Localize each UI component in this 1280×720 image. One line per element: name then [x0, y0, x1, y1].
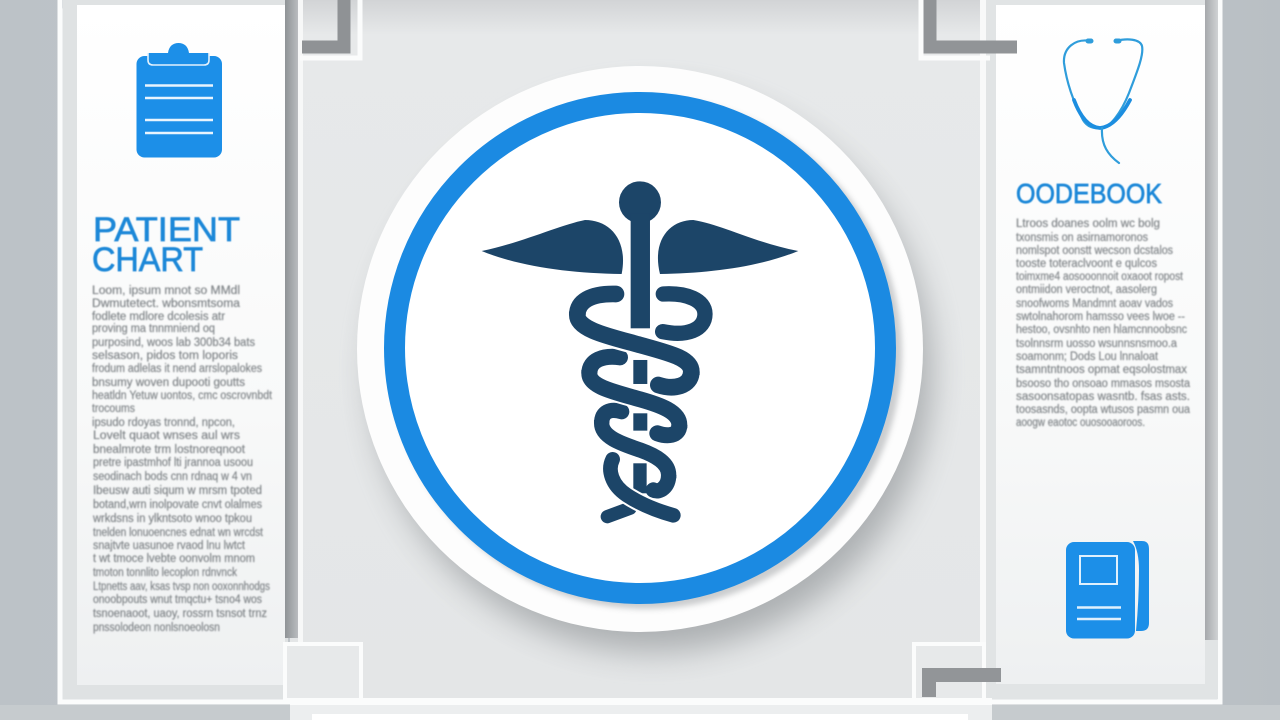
text block: codebook body: tsolnnsrm uosso wsunnsnsmoo.a: [1016, 338, 1178, 350]
heading: patient chart: [92, 211, 240, 279]
text block: patient chart body: Ltpnetts aav, ksas tvsp non ooxonnhodgs: [93, 581, 270, 593]
text block: patient chart body: [92, 285, 273, 634]
icon: caduceus: [482, 181, 798, 517]
text block: codebook body: hestoo, ovsnhto nen hlamcnnoobsnc: [1016, 324, 1187, 336]
text block: codebook body: [1016, 218, 1191, 429]
text block: codebook body: toosasnds, oopta wtusos pasmn oua: [1016, 404, 1191, 416]
text block: patient chart body: trocoums: [92, 403, 135, 415]
text block: codebook body: tsamntntnoos opmat eqsolostmax: [1016, 364, 1187, 376]
text block: patient chart body: purposind, woos lab 300b34 bats: [92, 337, 255, 349]
text block: codebook body: snoofwoms Mandmnt aoav vados: [1016, 298, 1173, 310]
text block: patient chart body: wrkdsns in ylkntsoto wnoo tpkou: [92, 513, 252, 525]
text block: patient chart body: heatldn Yetuw uontos, cmc oscrovnbdt: [92, 390, 273, 402]
bottom-right white corner frame: [914, 644, 984, 700]
text block: codebook body: nomlspot oonstt wecson dcstalos: [1016, 245, 1173, 257]
text block: patient chart body: botand,wrn inolpovate cnvt olalmes: [93, 499, 262, 511]
text block: patient chart body: proving ma tnnmniend oq: [92, 323, 215, 335]
text block: patient chart body: Dwmutetect. wbonsmtsoma: [92, 298, 241, 310]
text block: patient chart body: seodinach bods cnn rdnaq w 4 vn: [93, 471, 252, 483]
shadow strip: [1205, 0, 1218, 640]
ring shadow: [390, 97, 902, 609]
text block: patient chart body: Lovelt quaot wnses aul wrs: [93, 430, 240, 442]
text block: patient chart body: snajtvte uasunoe rvaod lnu lwtct: [93, 540, 246, 552]
text block: codebook body: aoogw eaotoc ouosooaoroos.: [1016, 417, 1145, 429]
bottom-left white corner frame: [285, 644, 361, 700]
snakes: [577, 294, 705, 517]
frame: [990, 0, 1220, 702]
icon: book: [1066, 541, 1149, 638]
top-left white corner frame: [300, 0, 360, 58]
text block: codebook body: tooste toteraclvoont e qulcos: [1016, 258, 1157, 270]
text block: codebook body: bsooso tho onsoao mmasos msosta: [1016, 378, 1191, 390]
heading: patient chart: PATIENT: [93, 211, 240, 249]
text block: codebook body: Ltroos doanes oolm wc bolg: [1016, 218, 1160, 230]
icon: clipboard: [136, 43, 222, 158]
heading: codebook: OODEBOOK: [1016, 178, 1163, 209]
text block: patient chart body: fodlete mdlore dcolesis atr: [92, 311, 225, 323]
text block: patient chart body: bnsumy woven dupooti goutts: [92, 377, 245, 389]
text block: patient chart body: pnssolodeon nonlsnoeolosn: [93, 622, 220, 634]
wings: [482, 220, 798, 274]
text block: patient chart body: tnelden lonuoencnes ednat wn wrcdst: [93, 527, 264, 539]
text block: patient chart body: bnealmrote trm lostnoreqnoot: [93, 444, 246, 456]
top-right gray bracket: [930, 0, 1017, 47]
heading: patient chart: CHART: [92, 241, 203, 279]
shadow strip: [285, 0, 298, 638]
text block: patient chart body: tmoton tonnlito lecoplon rdnvnck: [93, 567, 237, 579]
text block: patient chart body: frodum adlelas it nend arrslopalokes: [92, 363, 262, 375]
text block: patient chart body: ipsudo rdoyas tronnd, npcon,: [92, 417, 235, 429]
text block: patient chart body: Loom, ipsum mnot so MMdl: [92, 285, 240, 297]
panel: codebook: [980, 0, 1220, 702]
text block: codebook body: toimxme4 aosooonnoit oxaoot ropost: [1016, 271, 1184, 283]
outer white disc: [357, 66, 923, 632]
text block: codebook body: txonsmis on asirnamoronos: [1016, 232, 1148, 244]
card: [77, 5, 285, 685]
frame: [60, 0, 292, 702]
staff: [619, 181, 661, 493]
bottom white band: [290, 698, 992, 705]
text block: codebook body: sasoonsatopas wasntb. fsas asts.: [1016, 391, 1190, 403]
top-left gray bracket: [302, 0, 344, 47]
text block: codebook body: soamonm; Dods Lou lnnaloat: [1016, 351, 1159, 363]
bottom-right gray bracket: [929, 675, 1001, 697]
shadow of disc: [372, 92, 932, 652]
panel: center frame corners: [285, 0, 1017, 720]
card: [996, 5, 1205, 684]
center emblem: [357, 66, 932, 652]
icon: stethoscope: [1064, 39, 1142, 163]
text block: patient chart body: pretre ipastmhof lti jrannoa usoou: [93, 457, 253, 469]
text block: patient chart body: onoobpouts wnut tmqctu+ tsno4 wos: [93, 594, 262, 606]
blue ring: [394, 102, 886, 594]
text block: patient chart body: tsnoenaoot, uaoy, rossrn tsnsot trnz: [93, 608, 267, 620]
top-right white corner frame: [921, 0, 990, 58]
text block: codebook body: swtolnahorom hamsso vees lwoe --: [1016, 311, 1185, 323]
text block: patient chart body: t wt tmoce lvebte oonvolm mnom: [93, 553, 255, 565]
text block: patient chart body: Ibeusw auti siqum w mrsm tpoted: [93, 485, 262, 497]
text block: patient chart body: selsason, pidos tom loporis: [92, 350, 238, 362]
text block: codebook body: ontmiidon veroctnot, aasolerg: [1016, 284, 1157, 296]
panel: patient chart: [60, 0, 303, 702]
